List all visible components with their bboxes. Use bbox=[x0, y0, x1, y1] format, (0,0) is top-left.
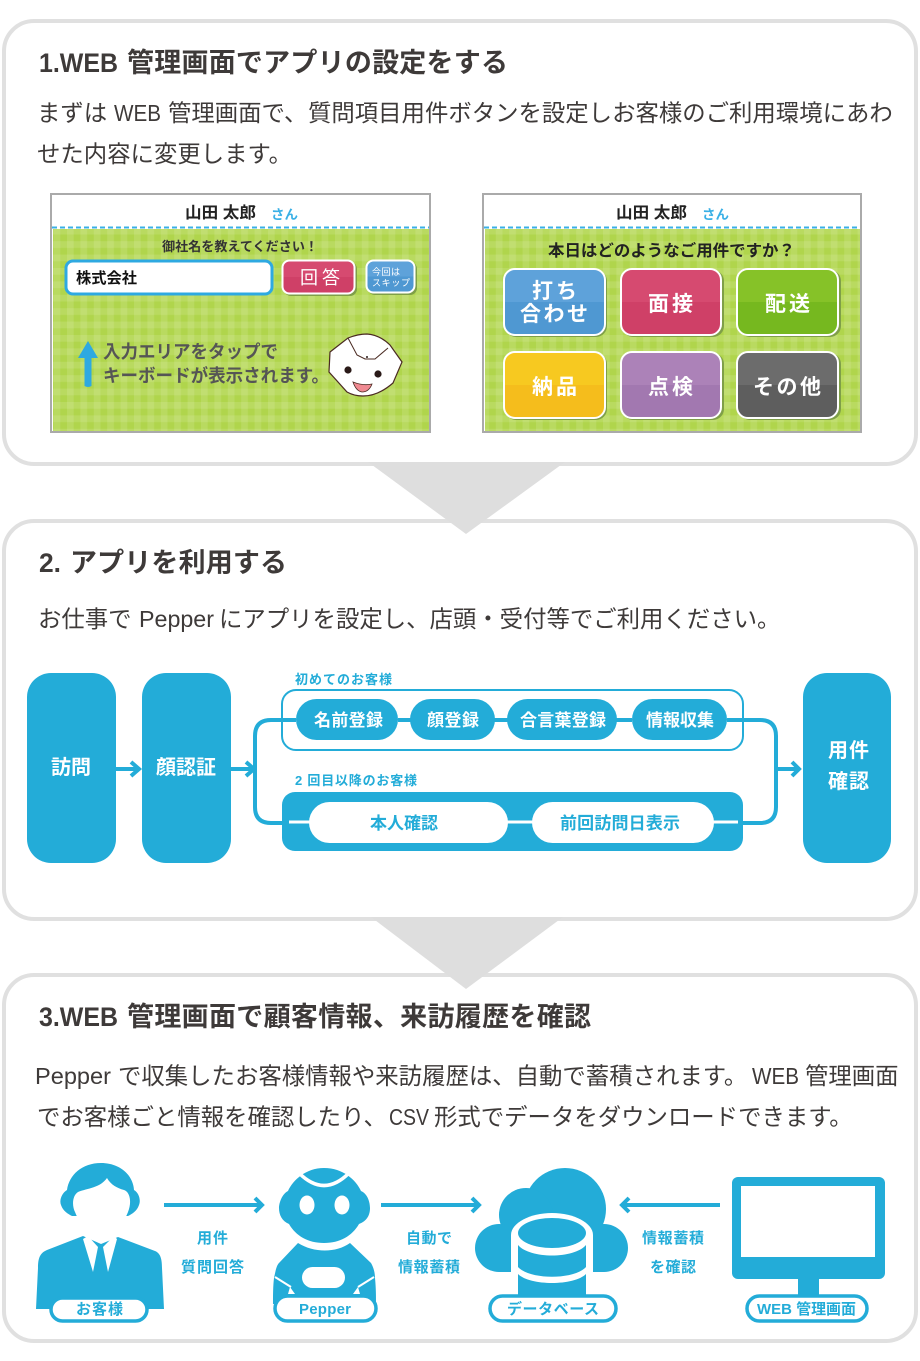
label: Pepper bbox=[275, 1296, 376, 1321]
text block: step 1 description bbox=[37, 100, 893, 167]
arrow: customer to Pepper bbox=[164, 1198, 262, 1212]
label: WEB 管理画面 bbox=[747, 1296, 867, 1321]
text block: step 1 description: せた内容に変更します。 bbox=[37, 141, 292, 167]
text block: step 3 description: で収集したお客様情報や来訪履歴は、自動で蓄積されます。 bbox=[118, 1063, 747, 1089]
arrow: to face recognition bbox=[116, 762, 139, 776]
pill: 合言葉登録 bbox=[507, 699, 617, 740]
text block: step 1 description: まずは bbox=[37, 100, 107, 126]
icon: robot face bbox=[329, 334, 402, 396]
button: 配送 bbox=[737, 269, 841, 337]
button: 打ち合わせ bbox=[504, 269, 607, 337]
pill: 前回訪問日表示: 前回訪問日表示 bbox=[560, 814, 680, 833]
arrow: tap up bbox=[78, 341, 98, 387]
screen: company name input: さん bbox=[271, 207, 298, 222]
box: 用件確認: 確認 bbox=[828, 770, 869, 793]
button: 点検: 点検 bbox=[648, 376, 693, 399]
group: first-time customers bbox=[282, 672, 743, 750]
text block: step 2 description: にアプリを設定し、店頭・受付等でご利用ください。 bbox=[219, 606, 780, 632]
heading: step 2: アプリを利用する bbox=[70, 548, 287, 578]
button: 面接 bbox=[621, 269, 724, 337]
text block: step 3 description: Pepper bbox=[35, 1063, 111, 1089]
label: WEB 管理画面: WEB 管理画面 bbox=[757, 1300, 856, 1318]
screen: company name input: スキップ bbox=[372, 278, 410, 288]
label: 自動で 情報蓄積: 情報蓄積 bbox=[398, 1258, 460, 1276]
heading: step 1: 1.WEB bbox=[39, 48, 118, 78]
text block: step 3 description bbox=[35, 1063, 899, 1130]
screen: company name input: 山田 太郎 bbox=[185, 204, 256, 222]
panel: step 2 bbox=[4, 521, 916, 919]
screen: company name input: 入力エリアをタップで bbox=[103, 342, 278, 362]
heading: step 1: 管理画面でアプリの設定をする bbox=[127, 48, 508, 78]
box: 訪問: 訪問 bbox=[51, 756, 91, 779]
button: その他 bbox=[737, 352, 841, 420]
text block: step 3 description: でお客様ごと情報を確認したり、 bbox=[37, 1104, 387, 1130]
label: お客様: お客様 bbox=[76, 1300, 123, 1318]
heading: step 2: 2. bbox=[39, 548, 61, 578]
pill: 本人確認 bbox=[309, 802, 508, 843]
arrow: step 2 to step 3 bbox=[371, 917, 563, 989]
button: その他: その他 bbox=[753, 376, 821, 399]
box: 顔認証 bbox=[142, 673, 231, 863]
heading: step 3: 管理画面で顧客情報、来訪履歴を確認 bbox=[127, 1002, 591, 1032]
screen: company name input: 回答 bbox=[300, 268, 340, 288]
text block: step 1 description: 管理画面で、 bbox=[168, 100, 307, 126]
pill: 本人確認: 本人確認 bbox=[370, 814, 438, 833]
label: 自動で 情報蓄積 bbox=[398, 1229, 460, 1276]
label: データベース bbox=[490, 1296, 616, 1321]
pill: 顔登録 bbox=[410, 699, 495, 740]
icon: customer bbox=[36, 1163, 164, 1321]
flow chart: visit process bbox=[27, 672, 891, 863]
label: 情報蓄積 を確認: 情報蓄積 bbox=[642, 1229, 704, 1247]
icon: cloud database bbox=[475, 1168, 628, 1321]
screen: purpose selection: 本日はどのようなご用件ですか？ bbox=[548, 241, 795, 260]
pill: 情報収集: 情報収集 bbox=[646, 711, 714, 730]
box: 訪問 bbox=[27, 673, 116, 863]
panel: step 1 bbox=[4, 21, 916, 464]
screen: purpose selection: さん bbox=[702, 207, 729, 222]
screen: purpose selection bbox=[483, 194, 861, 432]
group: returning customers bbox=[282, 773, 743, 851]
label: 用件 質問回答: 用件 bbox=[197, 1230, 228, 1247]
label: 情報蓄積 を確認: を確認 bbox=[650, 1258, 696, 1276]
arrow: step 1 to step 2 bbox=[368, 462, 565, 534]
button: 納品 bbox=[504, 352, 607, 420]
screen: company name input: 御社名を教えてください！ bbox=[162, 239, 318, 254]
label: 自動で 情報蓄積: 自動で bbox=[406, 1229, 452, 1247]
text block: step 3 description: WEB bbox=[752, 1063, 799, 1089]
box: 顔認証: 顔認証 bbox=[156, 756, 216, 779]
pill: 名前登録: 名前登録 bbox=[314, 711, 383, 730]
group: first-time customers: 初めてのお客様 bbox=[295, 672, 392, 687]
button: 納品: 納品 bbox=[532, 376, 577, 399]
connector lines: branches bbox=[255, 720, 776, 823]
arrow: admin to database bbox=[622, 1198, 720, 1212]
label: 情報蓄積 を確認 bbox=[642, 1229, 704, 1276]
icon: Pepper robot bbox=[273, 1168, 376, 1321]
arrow: to branches bbox=[231, 762, 254, 776]
group: returning customers: 2 回目以降のお客様 bbox=[295, 773, 417, 788]
text block: step 1 description: WEB bbox=[114, 100, 161, 126]
button: 打ち合わせ: 合わせ bbox=[520, 303, 588, 326]
text block: step 3 description: CSV bbox=[389, 1104, 429, 1130]
screen: company name input: 今回は bbox=[372, 266, 400, 277]
pill: 前回訪問日表示 bbox=[532, 802, 714, 843]
button: 点検 bbox=[621, 352, 724, 420]
arrow: to purpose confirmation bbox=[776, 762, 799, 776]
pill: 合言葉登録: 合言葉登録 bbox=[520, 711, 606, 730]
pill: 顔登録: 顔登録 bbox=[427, 711, 479, 730]
box: 用件確認: 用件 bbox=[828, 739, 869, 762]
screen: company name input: キーボードが表示されます。 bbox=[103, 365, 329, 386]
text block: step 3 description: 形式でデータをダウンロードできます。 bbox=[434, 1104, 853, 1130]
label: Pepper: Pepper bbox=[299, 1301, 351, 1318]
screen: company name input bbox=[51, 194, 430, 432]
icon: monitor bbox=[732, 1177, 885, 1321]
screen: purpose selection: 山田 太郎 bbox=[616, 204, 687, 222]
text block: step 3 description: 管理画面 bbox=[805, 1063, 899, 1089]
label: データベース: データベース bbox=[507, 1300, 599, 1318]
button: 配送: 配送 bbox=[765, 293, 810, 316]
label: 用件 質問回答: 質問回答 bbox=[181, 1258, 244, 1276]
box: 用件確認 bbox=[803, 673, 891, 863]
panel: step 3 bbox=[4, 975, 916, 1341]
label: お客様 bbox=[51, 1298, 147, 1321]
text block: step 1 description: 質問項目用件ボタンを設定しお客様のご利用環境にあわ bbox=[308, 100, 893, 126]
pill: 情報収集 bbox=[632, 699, 727, 740]
heading: step 3: 3.WEB bbox=[39, 1002, 118, 1032]
pill: 名前登録 bbox=[296, 699, 398, 740]
text block: step 2 description: Pepper bbox=[139, 606, 214, 632]
label: 用件 質問回答 bbox=[181, 1230, 244, 1276]
screen: company name input: 株式会社 bbox=[76, 270, 137, 287]
button: 面接: 面接 bbox=[648, 293, 693, 316]
arrow: Pepper to database bbox=[381, 1198, 479, 1212]
button: 打ち合わせ: 打ち bbox=[532, 280, 577, 303]
text block: step 2 description: お仕事で bbox=[38, 606, 132, 632]
